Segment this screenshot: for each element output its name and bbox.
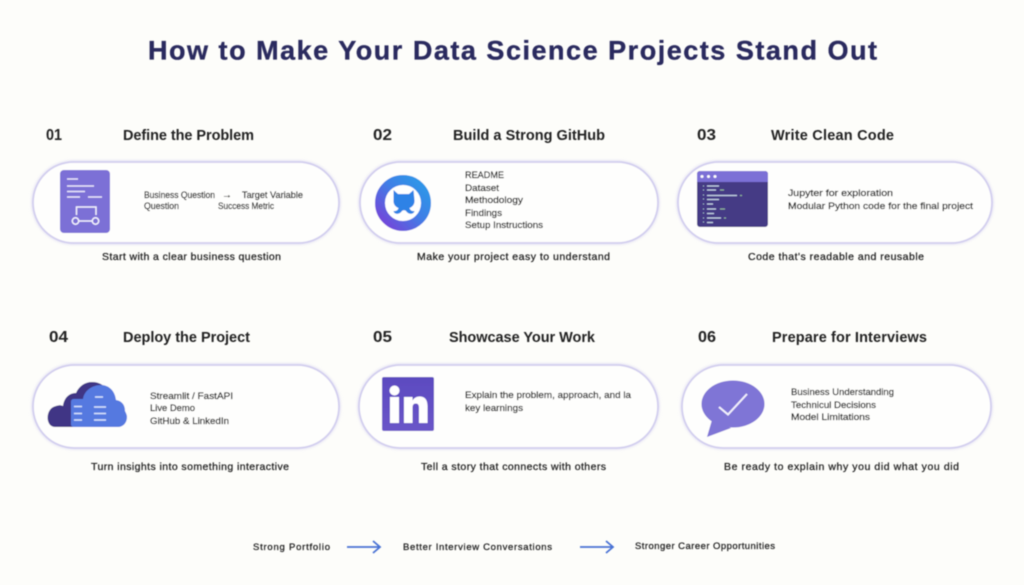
text: business question to target variable: Business Question	[144, 190, 215, 201]
text: jupyter and modular python: Modular Python code for the final project	[788, 201, 973, 212]
panel: 06 prepare for interviews	[682, 329, 991, 473]
card outline	[678, 162, 992, 243]
text: repository checklist: Dataset	[465, 183, 499, 194]
caption: Start with a clear business question	[102, 251, 281, 263]
text: jupyter and modular python: Jupyter for exploration	[788, 188, 893, 199]
icon: github cat ring	[380, 180, 426, 226]
text: business question to target variable: →	[222, 190, 232, 201]
text: interview topics: Business Understanding	[791, 387, 894, 398]
card outline	[360, 162, 658, 243]
panel: 03 write clean code	[678, 127, 992, 263]
text: repository checklist: README	[465, 170, 504, 181]
heading: define the problem: Define the Problem	[123, 128, 254, 144]
caption: Code that's readable and reusable	[748, 251, 924, 263]
text: repository checklist	[465, 170, 543, 231]
step number 03: 03	[697, 127, 716, 144]
text: interview topics	[791, 387, 894, 423]
heading: deploy the project: Deploy the Project	[123, 330, 250, 346]
icon: document with flow diagram	[60, 170, 110, 233]
step number 05: 05	[373, 329, 392, 346]
text: deployment options: GitHub & LinkedIn	[150, 416, 229, 427]
icon: speech bubble with check	[702, 380, 764, 437]
caption: Tell a story that connects with others	[421, 461, 606, 473]
caption: Be ready to explain why you did what you did	[724, 461, 959, 473]
card outline	[682, 365, 991, 448]
text: repository checklist: Setup Instructions	[465, 220, 543, 231]
arrow	[347, 541, 380, 553]
footer flow	[253, 541, 775, 553]
caption: Turn insights into something interactive	[91, 461, 289, 473]
card outline	[33, 162, 339, 243]
step number 04: 04	[49, 329, 68, 346]
text: jupyter and modular python	[788, 188, 973, 212]
arrow	[580, 541, 613, 553]
text: deployment options: Streamlit / FastAPI	[150, 391, 233, 402]
heading: write clean code: Write Clean Code	[771, 128, 894, 144]
panel: 01 define the problem	[33, 127, 339, 263]
text: repository checklist: Findings	[465, 208, 502, 219]
step number 06: 06	[698, 329, 716, 346]
icon: cloud with server	[48, 382, 127, 427]
panel: 05 showcase your work	[359, 329, 658, 473]
text: business question to target variable: Target Variable	[242, 190, 303, 201]
text: business question to target variable: Success Metric	[218, 201, 274, 212]
caption: Make your project easy to understand	[417, 251, 610, 263]
title: How to Make Your Data Science Projects Stand Out	[148, 36, 877, 66]
text: explain the problem: key learnings	[465, 403, 523, 414]
text: interview topics: Model Limitations	[791, 412, 870, 423]
text: deployment options	[150, 391, 233, 427]
text: business question to target variable: Question	[144, 201, 179, 212]
flow label: better interview conversations: Better Interview Conversations	[403, 542, 552, 553]
panel: 02 build a strong github	[360, 127, 658, 263]
icon: code editor window	[697, 171, 768, 227]
heading: build a strong github: Build a Strong GitHub	[453, 128, 605, 144]
card outline	[33, 365, 339, 448]
panel: 04 deploy the project	[33, 329, 339, 473]
heading: prepare for interviews: Prepare for Interviews	[772, 330, 927, 346]
text: explain the problem	[465, 390, 632, 414]
text: business question to target variable	[144, 190, 303, 212]
text: interview topics: Technicul Decisions	[791, 400, 876, 411]
text: deployment options: Live Demo	[150, 403, 195, 414]
text: repository checklist: Methodology	[465, 195, 523, 206]
flow label: stronger career opportunities: Stronger Career Opportunities	[635, 541, 775, 552]
card outline	[359, 365, 658, 448]
text: explain the problem: Explain the problem, approach, and la	[465, 390, 632, 401]
icon: linkedin	[382, 377, 434, 431]
heading: showcase your work: Showcase Your Work	[449, 330, 596, 346]
step number 02: 02	[373, 127, 392, 144]
step number 01: 01	[46, 127, 62, 144]
flow label: strong portfolio: Strong Portfolio	[253, 542, 330, 553]
